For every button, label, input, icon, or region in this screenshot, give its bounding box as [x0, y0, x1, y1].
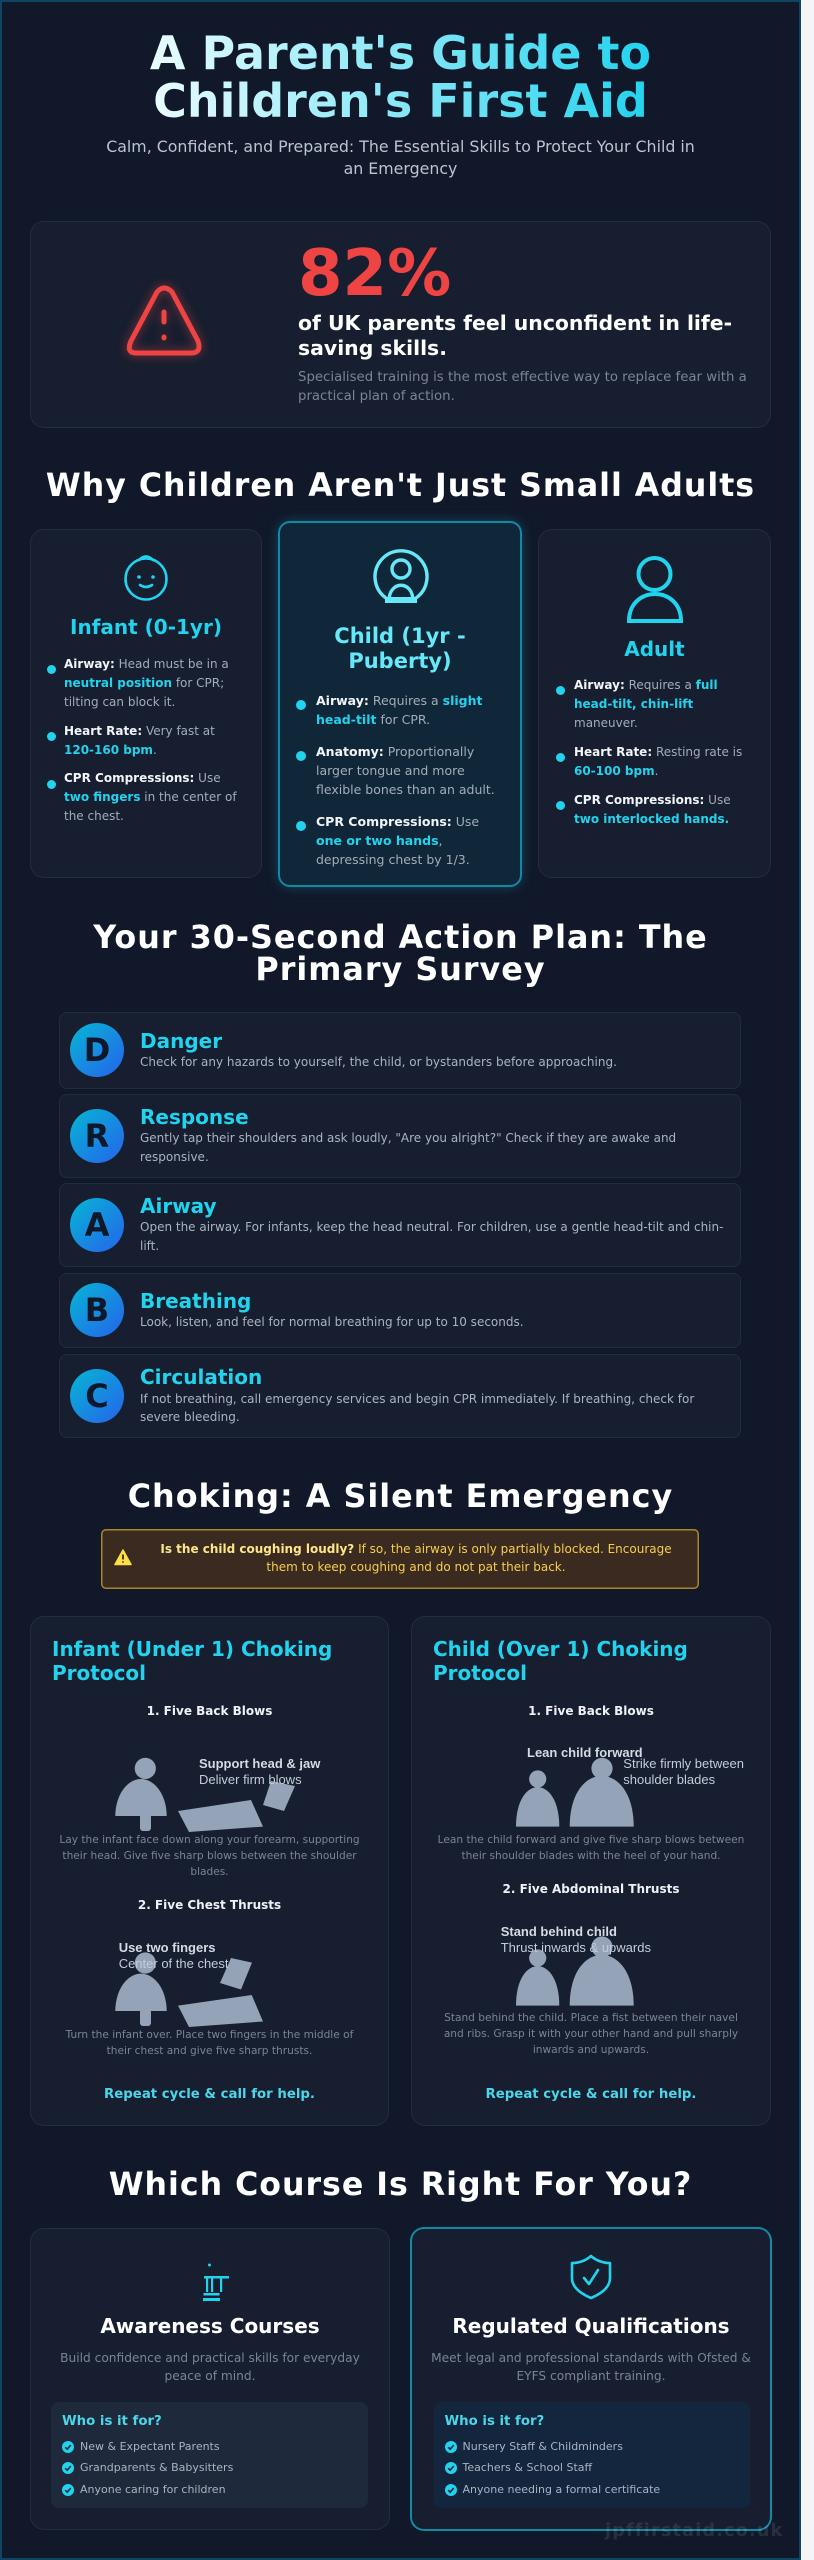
title: A Parent's Guide to: [150, 26, 651, 80]
card heading: Adult: [624, 637, 685, 661]
text: compressions: the chest.: [64, 809, 124, 823]
subtitle: an Emergency: [344, 158, 457, 178]
icon: check: [444, 2484, 456, 2496]
course description: Build confidence and practical skills for everyday: [60, 2350, 360, 2364]
icon: adult person: [627, 556, 683, 623]
bullet: compressions: [296, 821, 306, 831]
text: compressions: one or two hands,: [316, 833, 442, 848]
callout: coughing alert: [101, 1529, 699, 1589]
step description: blades.: [190, 1866, 229, 1878]
step heading: chest thrusts: 2. Five Chest Thrusts: [138, 1898, 281, 1912]
diagram label: child: Lean child forward: [527, 1745, 643, 1760]
icon: check: [444, 2441, 456, 2453]
diagram label: Stand behind child: [501, 1924, 617, 1939]
course description: peace of mind.: [164, 2369, 256, 2383]
step description: [438, 1834, 744, 1862]
step text: If not breathing, call emergency services and begin CPR immediately. If breathing, check for: [140, 1392, 694, 1406]
text: compressions: two interlocked hands.: [574, 812, 729, 826]
step text: Look, listen, and feel for normal breathing for up to 10 seconds.: [140, 1314, 524, 1328]
card heading: Child (1yr -: [334, 624, 466, 648]
icon: check: [62, 2484, 74, 2496]
panel heading: Child (Over 1) Choking: [433, 1637, 688, 1661]
panel: infant: [30, 529, 262, 878]
step heading: back blows: 1. Five Back Blows: [147, 1704, 272, 1718]
panel: regulated qualifications: [410, 2227, 772, 2531]
diagram: infant chest thrusts: [115, 1952, 263, 2027]
list item: Nursery Staff & Childminders: [462, 2440, 623, 2453]
text: compressions: CPR Compressions: Use: [64, 771, 221, 785]
list heading: Who is it for?: [444, 2414, 544, 2429]
repeat note: Repeat cycle & call for help.: [104, 2087, 315, 2102]
course description: [410, 2348, 772, 2386]
step: airway: [59, 1183, 741, 1267]
bullet: airway: [47, 665, 56, 674]
letter badge: D: [84, 1031, 110, 1069]
step text: Gently tap their shoulders and ask loudly, "Are you alright?" Check if they are awake and: [140, 1131, 676, 1145]
course description: EYFS compliant training.: [516, 2369, 666, 2383]
step description: Lay the infant face down along your forearm, supporting: [59, 1834, 360, 1846]
text: airway: neutral position for CPR;: [64, 676, 224, 690]
title: Children's First Aid: [153, 74, 648, 128]
big number: 82%: [298, 237, 451, 311]
step text: severe bleeding.: [140, 1410, 240, 1424]
step: response: [59, 1094, 741, 1178]
diagram label: strike: shoulder blades: [623, 1772, 715, 1787]
text: airway: tilting can block it.: [64, 695, 175, 709]
panel heading: Infant (Under 1) Choking: [52, 1637, 332, 1661]
diagram: child back blows: [516, 1758, 634, 1827]
diagram label: Support head & jaw: [199, 1756, 320, 1771]
bullet: heart rate: [47, 732, 56, 741]
diagram: infant back blows: [115, 1758, 295, 1832]
letter badge: [70, 1023, 124, 1077]
icon: check: [62, 2462, 74, 2474]
diagram label: Center of the chest: [119, 1956, 229, 1971]
step: danger: [59, 1012, 741, 1089]
letter badge: [70, 1198, 124, 1252]
title: [150, 26, 651, 128]
icon: check: [444, 2462, 456, 2474]
diagram label: Thrust inwards & upwards: [501, 1940, 651, 1955]
panel: audience list: [51, 2402, 368, 2508]
icon: child in circle: [373, 549, 429, 603]
bullet: compressions: [556, 801, 565, 810]
step text: [140, 1131, 676, 1164]
text: heart rate: Heart Rate: Very fast at: [64, 724, 215, 738]
list item: Anyone caring for children: [80, 2483, 226, 2496]
heading: which course: Which Course Is Right For You?: [109, 2167, 692, 2203]
bullet: compressions: [47, 780, 56, 789]
panel: awareness courses: [30, 2228, 390, 2530]
repeat note: Repeat cycle & call for help.: [486, 2087, 696, 2102]
step text: lift.: [140, 1239, 159, 1253]
step description: and ribs. Grasp it with your other hand and pull sharply: [444, 2028, 738, 2040]
diagram label: Deliver firm blows: [199, 1772, 302, 1787]
text: anatomy: [316, 744, 495, 797]
panel: audience list: [434, 2402, 750, 2508]
bullet: airway: [556, 686, 565, 695]
step title: Breathing: [140, 1289, 251, 1313]
step description: [66, 2028, 354, 2056]
text: airway: head-tilt for CPR.: [316, 712, 430, 727]
panel: adult: [538, 529, 771, 878]
list item: Teachers & School Staff: [462, 2461, 592, 2474]
panel: infant choking protocol: [30, 1616, 389, 2126]
diagram label: [199, 1756, 320, 1787]
text: heart rate: 60-100 bpm.: [574, 764, 658, 778]
text: airway: Airway: Requires a full: [574, 678, 718, 692]
text: compressions: [316, 814, 479, 867]
course description: Meet legal and professional standards with Ofsted &: [431, 2350, 751, 2364]
text: airway: Airway: Head must be in a: [64, 657, 229, 671]
step: circulation: [59, 1354, 741, 1438]
text: airway: [316, 692, 483, 727]
stat note: [298, 370, 747, 404]
course title: Regulated Qualifications: [452, 2314, 730, 2338]
step description: Stand behind the child. Place a fist between their navel: [444, 2012, 738, 2024]
text: anatomy: Anatomy: Proportionally: [316, 744, 474, 758]
text: airway: head-tilt, chin-lift: [574, 697, 693, 711]
icon: warning: [114, 1549, 132, 1566]
stat note: Specialised training is the most effective way to replace fear with a: [298, 370, 747, 385]
step text: Check for any hazards to yourself, the child, or bystanders before approaching.: [140, 1054, 617, 1068]
panel heading: Protocol: [433, 1661, 527, 1685]
step description: Turn the infant over. Place two fingers in the middle of: [66, 2028, 353, 2040]
subtitle: Calm, Confident, and Prepared: The Essential Skills to Protect Your Child in: [106, 137, 695, 156]
stat headline: saving skills.: [298, 336, 447, 360]
panel: 82% statistic: [30, 221, 771, 428]
diagram label: [119, 1940, 229, 1971]
stat headline: [298, 311, 732, 360]
text: anatomy: flexible bones than an adult.: [316, 782, 495, 797]
text: heart rate: 120-160 bpm.: [64, 743, 157, 757]
panel heading: [52, 1637, 332, 1685]
list item: Anyone needing a formal certificate: [462, 2483, 660, 2496]
bullet: airway: [296, 700, 306, 710]
letter badge: A: [85, 1206, 109, 1244]
subtitle: [106, 137, 695, 178]
diagram label: strike: Strike firmly between: [623, 1756, 744, 1771]
callout text: them to keep coughing and do not pat their back.: [266, 1560, 566, 1574]
step description: Lean the child forward and give five sharp blows between: [438, 1834, 744, 1846]
text: anatomy: larger tongue and more: [316, 763, 465, 778]
panel: child highlighted: [278, 521, 522, 887]
text: airway: Airway: Requires a slight: [316, 692, 483, 708]
text: compressions: CPR Compressions: Use: [574, 793, 731, 807]
step title: Danger: [140, 1029, 222, 1053]
course title: Awareness Courses: [100, 2314, 320, 2338]
text: heart rate: Heart Rate: Resting rate is: [574, 745, 742, 759]
diagram label: [501, 1924, 651, 1955]
icon: check: [62, 2441, 74, 2453]
bullet: heart rate: [556, 753, 565, 762]
stat headline: of UK parents feel unconfident in life-: [298, 311, 732, 335]
panel heading: [433, 1637, 688, 1685]
watermark: jpffirstaid.co.uk: [605, 2521, 784, 2541]
panel heading: Protocol: [52, 1661, 146, 1685]
callout text: [160, 1542, 672, 1574]
step: breathing: [59, 1273, 741, 1348]
text: compressions: CPR Compressions: Use: [316, 814, 479, 828]
text: compressions: [574, 793, 731, 826]
text: airway: [64, 657, 229, 709]
letter badge: C: [85, 1377, 109, 1415]
list item: Grandparents & Babysitters: [80, 2461, 233, 2474]
icon: baby face: [124, 555, 168, 601]
icon: shield check: [569, 2254, 613, 2300]
list heading: Who is it for?: [62, 2414, 162, 2429]
step description: their chest and give five sharp thrusts.: [107, 2044, 312, 2056]
step title: Airway: [140, 1194, 217, 1218]
stat note: practical plan of action.: [298, 389, 455, 404]
card heading: [334, 624, 466, 672]
step description: [444, 2012, 738, 2056]
step description: their head. Give five sharp blows between the shoulder: [62, 1850, 357, 1862]
heading: action plan: Primary Survey: [255, 951, 546, 988]
diagram label: Use two fingers: [119, 1940, 215, 1955]
heading: choking: Choking: A Silent Emergency: [128, 1478, 673, 1515]
step text: responsive.: [140, 1150, 209, 1164]
card heading: Infant (0-1yr): [70, 615, 222, 639]
text: heart rate: [574, 745, 742, 778]
step description: their shoulder blades with the heel of your hand.: [461, 1850, 721, 1862]
letter badge: R: [85, 1117, 109, 1155]
bullet: anatomy: [296, 751, 306, 761]
diagram: child abdominal thrusts: [516, 1936, 634, 2006]
letter badge: [70, 1283, 124, 1337]
step title: Response: [140, 1105, 249, 1129]
text: compressions: two fingers in the center of: [64, 790, 237, 804]
list item: New & Expectant Parents: [80, 2440, 220, 2453]
step heading: back blows: 1. Five Back Blows: [528, 1704, 654, 1718]
text: compressions: [64, 771, 237, 823]
text: heart rate: [64, 724, 215, 757]
step heading: abdominal thrusts: 2. Five Abdominal Thrusts: [502, 1882, 680, 1896]
card heading: Puberty): [348, 648, 452, 672]
text: airway: maneuver.: [574, 716, 638, 730]
diagram label: strike: [623, 1756, 744, 1787]
letter badge: [70, 1109, 124, 1163]
panel: child choking protocol: [411, 1616, 771, 2126]
heading: action plan: [93, 919, 708, 988]
course description: [30, 2348, 390, 2386]
step description: [59, 1834, 360, 1878]
step title: Circulation: [140, 1365, 262, 1389]
icon: warning triangle: [120, 279, 208, 363]
icon: columns: [203, 2264, 229, 2301]
step description: inwards and upwards.: [533, 2044, 649, 2056]
step text: [140, 1220, 723, 1253]
heading: action plan: Your 30-Second Action Plan: The: [93, 919, 708, 956]
letter badge: B: [85, 1291, 109, 1329]
letter badge: [70, 1369, 124, 1423]
step text: [140, 1392, 694, 1424]
heading: why children: Why Children Aren't Just Small Adults: [46, 468, 755, 504]
text: compressions: depressing chest by 1/3.: [316, 852, 470, 867]
text: airway: [574, 678, 718, 730]
callout text: Is the child coughing loudly? If so, the airway is only partially blocked. Encourage: [160, 1542, 672, 1556]
step text: Open the airway. For infants, keep the head neutral. For children, use a gentle head-tilt and chin-: [140, 1220, 723, 1234]
